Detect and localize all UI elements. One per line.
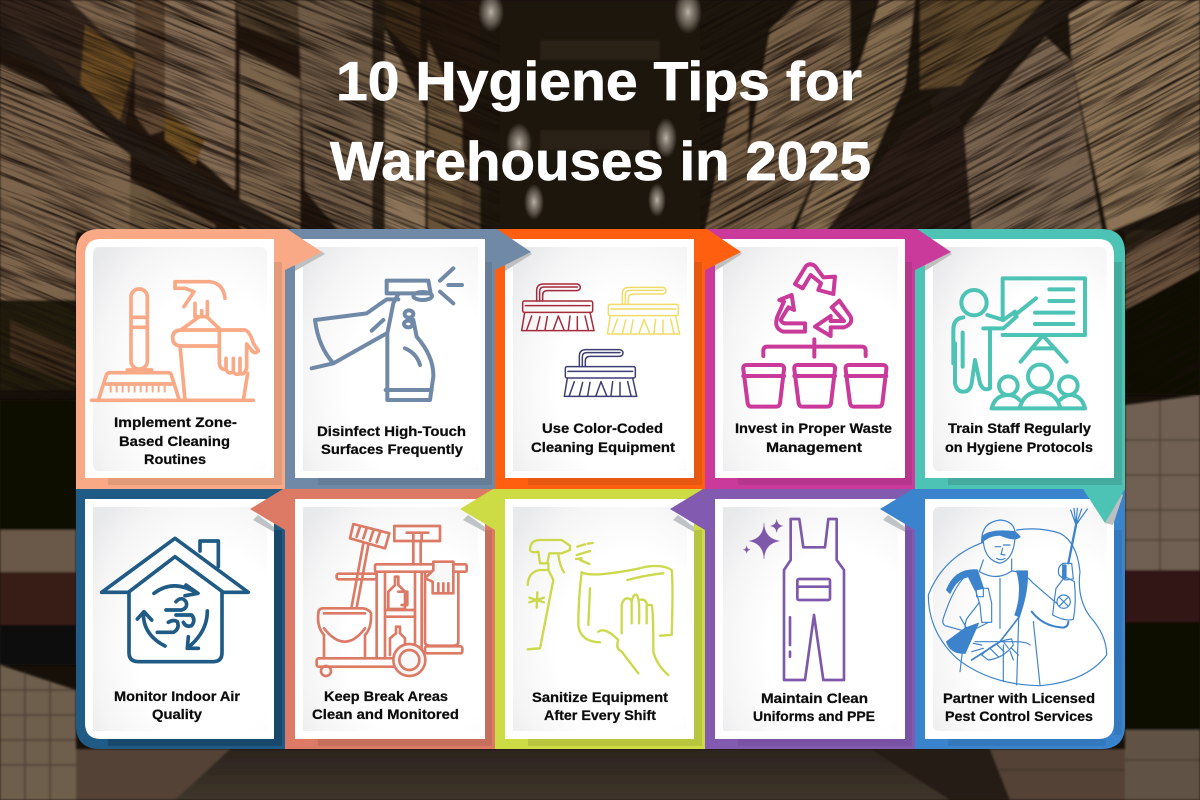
arrow: left pointer (460, 489, 495, 532)
text: maintain clean uniforms and PPE: Uniforms and PPE (753, 708, 875, 724)
ceiling lights (478, 0, 504, 32)
text: keep break areas clean and monitored: Clean and Monitored (312, 706, 459, 722)
arrow: left pointer (670, 489, 705, 532)
text: disinfect high-touch surfaces frequently: Surfaces Frequently (321, 441, 463, 457)
icon: broom, bucket, spray and glove (92, 282, 258, 400)
text: partner with licensed pest control services: Partner with Licensed (943, 690, 1095, 706)
text: implement zone-based cleaning routines: Based Cleaning (119, 433, 230, 449)
panel: tip 9 clean uniforms and PPE (670, 489, 915, 749)
arrow: down pointer (1083, 489, 1125, 525)
text: use color-coded cleaning equipment (531, 420, 675, 455)
icon: overalls with sparkles (743, 519, 844, 680)
text: sanitize equipment after every shift (532, 689, 668, 723)
panel: tip 4 waste management (705, 229, 952, 489)
panel: tip 3 color-coded equipment (495, 229, 742, 489)
panel: tip 1 zone-based cleaning (76, 229, 325, 489)
panel: tip 7 keep break areas clean (250, 489, 495, 749)
text: partner with licensed pest control services: Pest Control Services (945, 708, 1093, 724)
text: sanitize equipment after every shift: After Every Shift (544, 707, 656, 723)
title: 10 Hygiene Tips for (336, 50, 862, 112)
icon: hand with spray bottle (312, 268, 462, 400)
title: Warehouses in 2025 (330, 130, 871, 192)
text: invest in proper waste management (735, 420, 892, 455)
panel: tip 2 disinfect high-touch surfaces (285, 229, 532, 489)
text: maintain clean uniforms and PPE: Maintain Clean (761, 690, 868, 706)
arrow: right pointer (915, 229, 952, 271)
text: invest in proper waste management: Invest in Proper Waste (735, 420, 892, 436)
text: invest in proper waste management: Management (766, 439, 862, 455)
arrow: right pointer (705, 229, 742, 271)
icon: spray bottle and wiping cloth (528, 540, 672, 675)
panel: tip 8 sanitize equipment (460, 489, 705, 749)
icon: trainer at whiteboard with audience (953, 278, 1085, 408)
text: keep break areas clean and monitored (312, 688, 459, 722)
text: sanitize equipment after every shift: Sanitize Equipment (532, 689, 668, 705)
text: implement zone-based cleaning routines (114, 414, 237, 467)
icon: cleaning cart (317, 524, 467, 676)
panel: tip 6 monitor indoor air quality (76, 489, 285, 749)
text: train staff regularly on hygiene protocols (945, 420, 1093, 455)
title (330, 50, 871, 192)
arrow: left pointer (880, 489, 915, 532)
icon: pest control worker (928, 508, 1107, 686)
text: monitor indoor air quality (114, 688, 241, 722)
text: maintain clean uniforms and PPE (753, 690, 875, 724)
icon: house with air circulation (102, 538, 248, 662)
text: train staff regularly on hygiene protocols: Train Staff Regularly (948, 420, 1091, 436)
icon: recycling and three bins (743, 264, 886, 407)
arrow: left pointer (250, 489, 285, 532)
text: use color-coded cleaning equipment: Use Color-Coded (542, 420, 663, 436)
icon: three color-coded brushes (522, 284, 680, 396)
text: disinfect high-touch surfaces frequently: Disinfect High-Touch (317, 423, 466, 439)
text: implement zone-based cleaning routines: Implement Zone- (114, 414, 237, 430)
panel: tip 10 licensed pest control (880, 489, 1125, 749)
text: train staff regularly on hygiene protocols: on Hygiene Protocols (945, 439, 1093, 455)
panel: tip 5 train staff (915, 229, 1125, 525)
text: use color-coded cleaning equipment: Cleaning Equipment (531, 439, 675, 455)
text: partner with licensed pest control services (943, 690, 1095, 724)
text: monitor indoor air quality: Monitor Indoor Air (114, 688, 241, 704)
arrow: right pointer (285, 229, 325, 271)
text: disinfect high-touch surfaces frequently (317, 423, 466, 457)
arrow: right pointer (495, 229, 532, 271)
text: monitor indoor air quality: Quality (152, 706, 202, 722)
text: implement zone-based cleaning routines: Routines (144, 451, 206, 467)
text: keep break areas clean and monitored: Keep Break Areas (324, 688, 448, 704)
